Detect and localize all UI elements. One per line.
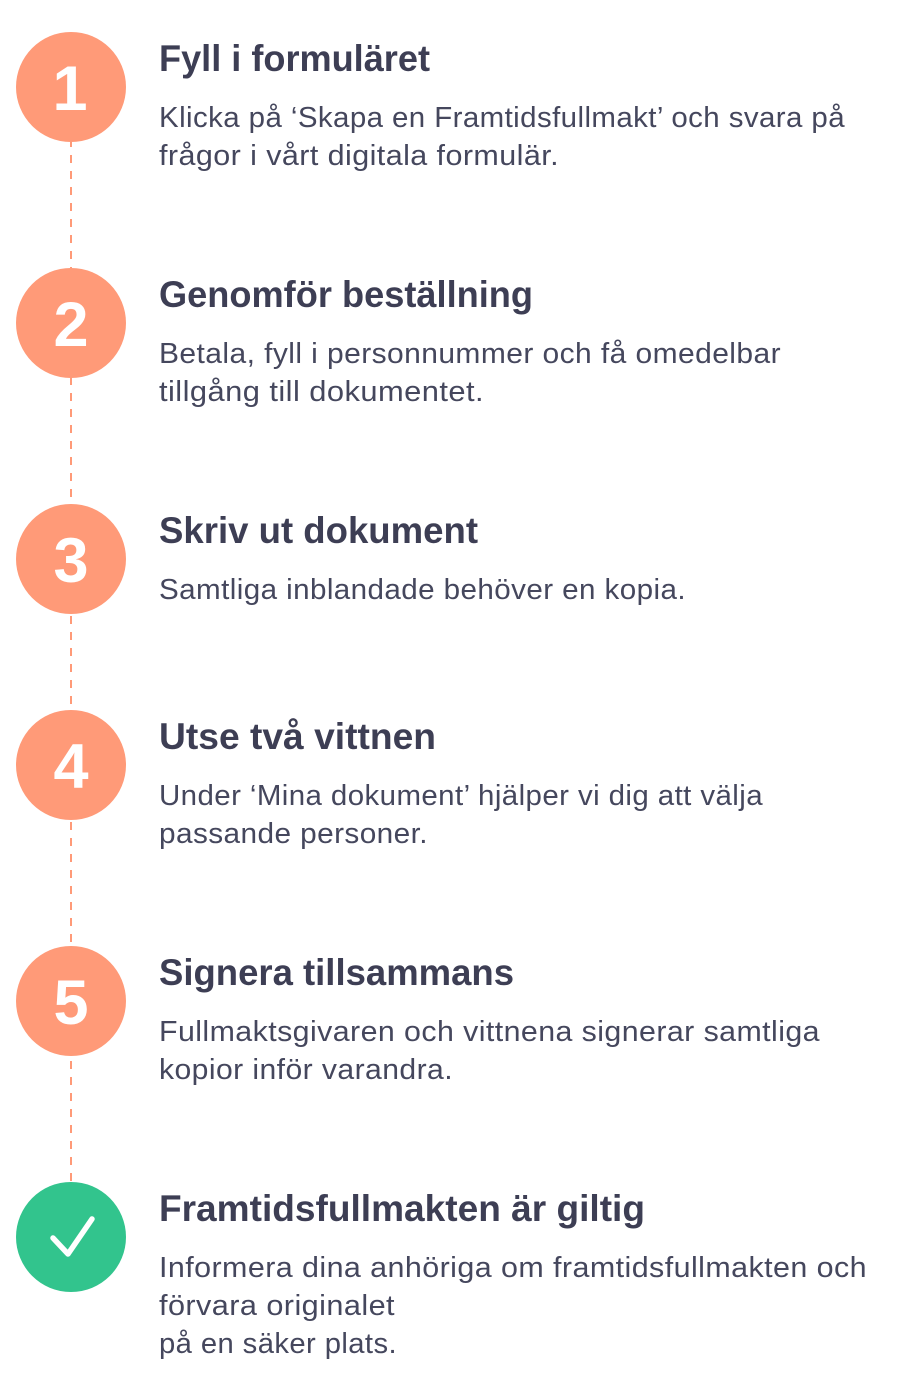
icon: number 4	[16, 710, 126, 820]
text block: step 4	[159, 780, 763, 850]
step 2: Genomför beställning	[16, 268, 781, 408]
text block: step 4: passande personer.	[159, 818, 428, 850]
text block: step 1	[159, 102, 845, 172]
text block: step 6: förvara originalet	[159, 1290, 395, 1322]
text block: step 2	[159, 338, 781, 408]
step 1: Fyll i formuläret	[16, 32, 845, 172]
icon: number 4: 4	[53, 732, 89, 802]
text block: step 2: Betala, fyll i personnummer och få omedelbar	[159, 338, 781, 370]
text block: step 1: frågor i vårt digitala formulär.	[159, 140, 559, 172]
icon: number 2	[16, 268, 126, 378]
text block: step 6: på en säker plats.	[159, 1328, 397, 1360]
step 3: Skriv ut dokument	[16, 504, 686, 614]
icon: number 3	[16, 504, 126, 614]
heading: step 4: Utse två vittnen	[159, 716, 436, 757]
text block: step 5: kopior inför varandra.	[159, 1054, 453, 1086]
heading: step 2: Genomför beställning	[159, 274, 533, 315]
icon: number 2: 2	[53, 290, 89, 360]
step 5: Signera tillsammans	[16, 946, 820, 1086]
step 6: Framtidsfullmakten är giltig	[16, 1182, 867, 1360]
text block: step 5	[159, 1016, 820, 1086]
icon: green check mark	[16, 1182, 126, 1292]
icon: number 1	[16, 32, 126, 142]
icon: number 1: 1	[52, 54, 88, 124]
text block: step 4: Under ‘Mina dokument’ hjälper vi dig att välja	[159, 780, 763, 812]
text block: step 2: tillgång till dokumentet.	[159, 376, 484, 408]
heading: step 3: Skriv ut dokument	[159, 510, 478, 551]
text block: step 1: Klicka på ‘Skapa en Framtidsfullmakt’ och svara på	[159, 102, 845, 134]
step 4: Utse två vittnen	[16, 710, 763, 850]
icon: number 5	[16, 946, 126, 1056]
icon: number 3: 3	[53, 526, 89, 596]
heading: step 1: Fyll i formuläret	[159, 38, 430, 79]
heading: step 5: Signera tillsammans	[159, 952, 514, 993]
text block: step 6: Informera dina anhöriga om framtidsfullmakten och	[159, 1252, 867, 1284]
icon: number 5: 5	[53, 968, 89, 1038]
text block: step 5: Fullmaktsgivaren och vittnena signerar samtliga	[159, 1016, 820, 1048]
heading: step 6: Framtidsfullmakten är giltig	[159, 1188, 645, 1229]
text block: step 3: Samtliga inblandade behöver en kopia.	[159, 574, 686, 606]
text block: step 6	[159, 1252, 867, 1360]
